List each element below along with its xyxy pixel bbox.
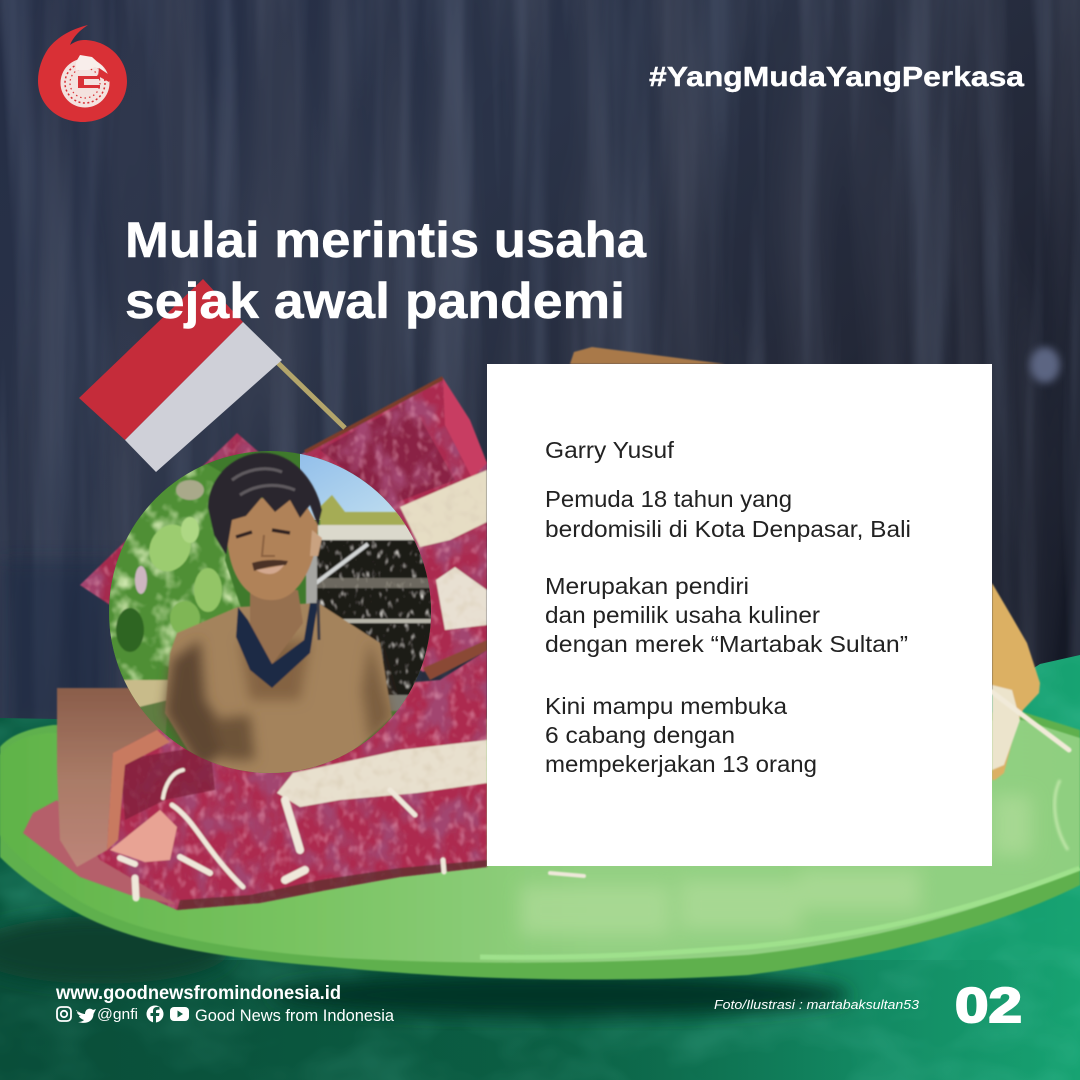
neck and tee xyxy=(250,590,303,667)
logo emblem xyxy=(60,55,111,108)
left back slice xyxy=(80,433,262,605)
top back slice xyxy=(300,378,487,680)
foliage xyxy=(109,464,240,681)
flag stick xyxy=(277,362,345,428)
cheese layer xyxy=(400,470,487,547)
dark fence xyxy=(316,539,431,696)
paragraph: branches xyxy=(545,693,817,777)
name: Garry Yusuf xyxy=(545,437,675,463)
footer: social handles xyxy=(57,1006,395,1025)
cheese band xyxy=(277,740,487,807)
ham slice xyxy=(110,810,177,862)
title xyxy=(125,212,647,329)
paragraph: founder: dengan merek “Martabak Sultan” xyxy=(545,631,908,657)
green plate xyxy=(0,712,1080,980)
icon: twitter xyxy=(76,1009,96,1023)
crust and cheese right of card xyxy=(992,583,1069,780)
paragraph: age and city: Pemuda 18 tahun yang xyxy=(545,486,792,512)
treeline xyxy=(320,495,415,530)
face xyxy=(227,495,318,600)
crust behind card xyxy=(570,347,725,364)
handle: @gnfi xyxy=(97,1006,138,1023)
icon: instagram xyxy=(57,1007,71,1021)
paragraph: age and city xyxy=(545,486,911,542)
red stripe xyxy=(79,279,243,440)
hashtag: #YangMudaYangPerkasa xyxy=(649,61,1024,92)
panel: text card xyxy=(487,364,992,866)
logo xyxy=(38,25,127,122)
paragraph: age and city: berdomisili di Kota Denpasar, Bali xyxy=(545,516,911,542)
plate rim highlight xyxy=(480,868,1080,957)
paragraph: branches: mempekerjakan 13 orang xyxy=(545,751,817,777)
martabak pieces xyxy=(23,347,1069,910)
hair xyxy=(208,453,322,555)
icon: facebook xyxy=(146,1006,164,1022)
building roof xyxy=(318,525,438,540)
crust block xyxy=(23,800,177,905)
icon: youtube xyxy=(170,1007,189,1021)
white stripe xyxy=(125,322,282,472)
background: green tablecloth xyxy=(0,655,1080,1080)
paragraph: founder xyxy=(545,573,908,657)
portrait photo xyxy=(109,445,438,790)
title: Mulai merintis usaha xyxy=(125,212,647,268)
ground xyxy=(124,678,168,708)
G bar xyxy=(78,76,100,88)
paragraph: founder: Merupakan pendiri xyxy=(545,573,749,599)
paragraph: branches: Kini mampu membuka xyxy=(545,693,787,719)
plate reflections xyxy=(520,795,1032,935)
paragraph: founder: dan pemilik usaha kuliner xyxy=(545,602,820,628)
footer: website: www.goodnewsfromindonesia.id xyxy=(55,983,341,1004)
cheese strands xyxy=(120,770,584,898)
sky xyxy=(300,454,402,520)
paragraph: branches: 6 cabang dengan xyxy=(545,722,735,748)
face mask xyxy=(236,603,318,688)
background: dark chalkboard xyxy=(0,0,1080,760)
flag xyxy=(79,279,345,472)
shirt xyxy=(165,603,392,790)
photo credit: Foto/Ilustrasi : martabaksultan53 xyxy=(714,997,920,1012)
title: sejak awal pandemi xyxy=(125,273,625,329)
page number: 02 xyxy=(955,979,1022,1033)
shirt shadows xyxy=(165,640,392,770)
page name: Good News from Indonesia xyxy=(195,1006,395,1025)
front slice xyxy=(23,650,584,910)
eagle head xyxy=(76,55,104,71)
